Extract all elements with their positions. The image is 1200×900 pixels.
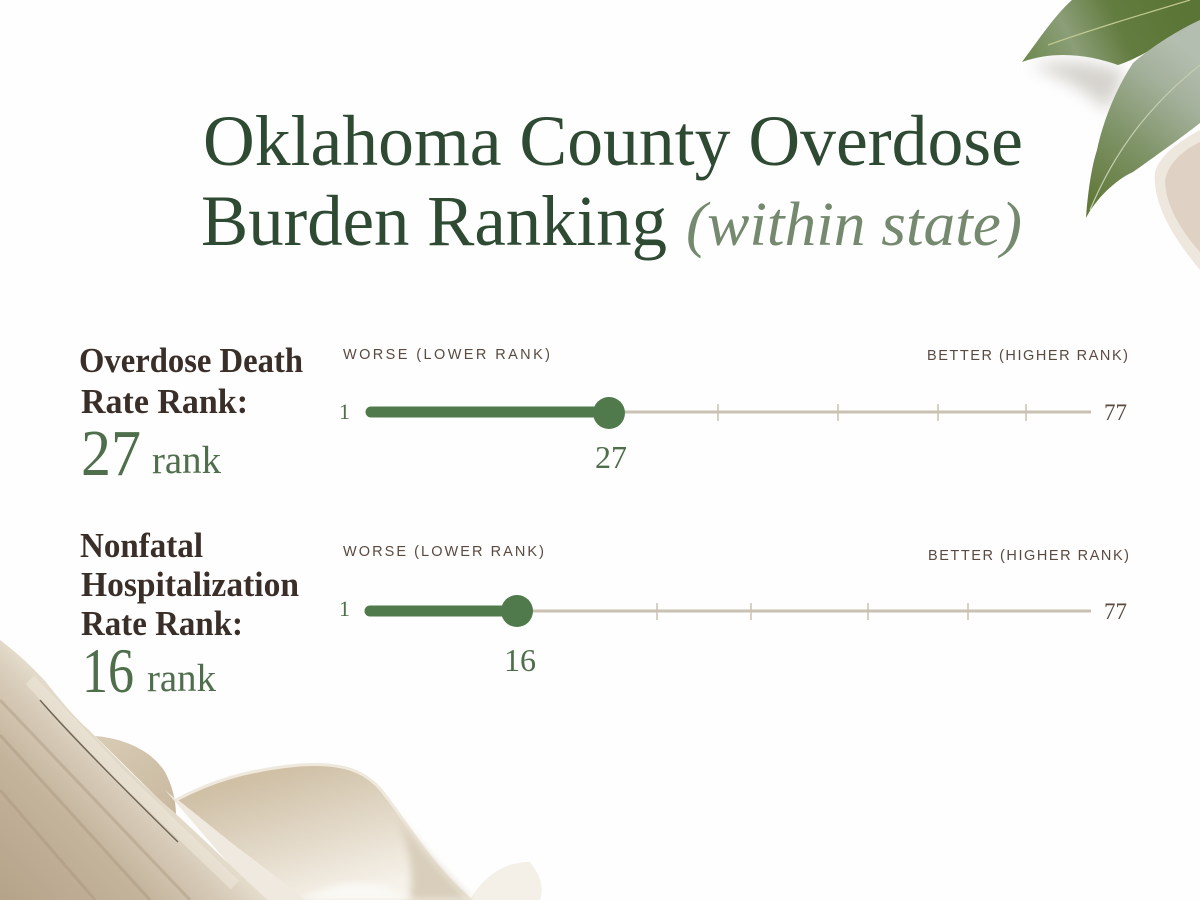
metric label: Hospitalization: [81, 565, 299, 604]
scale maximum: 77: [1104, 599, 1127, 624]
decoration: linen cloth top right: [1155, 130, 1200, 270]
decoration: driftwood bottom left: [0, 640, 268, 900]
decoration: leaf shadow: [1030, 62, 1125, 112]
scale caption: worse: WORSE (LOWER RANK): [343, 347, 550, 363]
scale caption: better: BETTER (HIGHER RANK): [928, 548, 1129, 564]
marker value: 27: [595, 439, 627, 475]
scale maximum: 77: [1104, 400, 1127, 425]
metric label: [79, 341, 303, 421]
metric label: Nonfatal: [80, 526, 203, 565]
panel: overdose death rate rank: [79, 341, 1128, 490]
slider fill and marker: [370, 595, 533, 627]
metric label: Rate Rank:: [81, 382, 248, 421]
metric label: Rate Rank:: [81, 604, 243, 643]
panel: nonfatal hospitalization rate rank: [80, 526, 1129, 706]
slider track: [600, 404, 1091, 421]
metric value: 27: [81, 417, 141, 490]
scale minimum: 1: [339, 399, 350, 424]
metric value: rank: [152, 439, 221, 482]
decoration: linen cloth bottom left: [95, 736, 542, 900]
metric label: Overdose Death: [79, 341, 303, 380]
metric label: [80, 526, 299, 643]
icon: lower leaf: [1086, 20, 1200, 218]
scale caption: worse: WORSE (LOWER RANK): [343, 544, 544, 560]
marker value: 16: [504, 642, 536, 678]
title: Oklahoma County Overdose: [203, 101, 1023, 181]
slider track: [510, 603, 1091, 620]
slider fill and marker: [371, 397, 625, 429]
title: [201, 101, 1023, 261]
scale minimum: 1: [339, 596, 350, 621]
metric value: [81, 417, 221, 490]
icon: upper leaf: [1022, 0, 1200, 65]
metric value: [82, 635, 216, 706]
metric value: rank: [147, 657, 216, 700]
title: (within state): [686, 191, 1022, 259]
title: Burden Ranking: [201, 181, 667, 261]
scale caption: better: BETTER (HIGHER RANK): [927, 348, 1128, 364]
metric value: 16: [82, 635, 134, 706]
